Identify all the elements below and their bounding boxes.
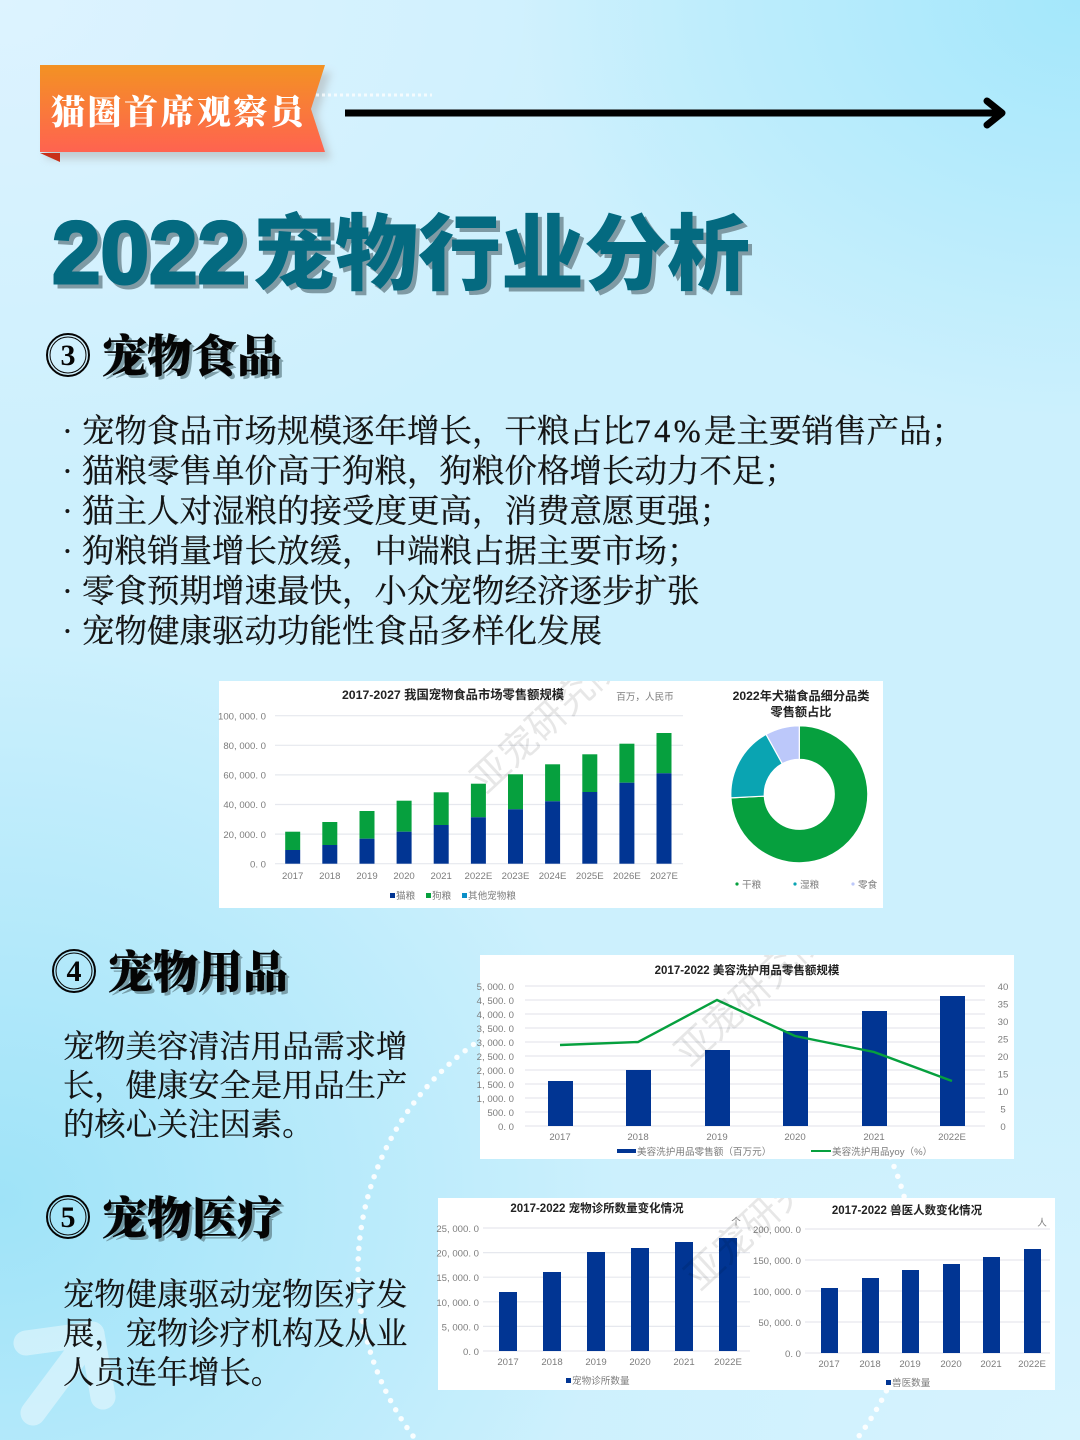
left axis: 4, 000. 0 (477, 1010, 514, 1021)
left axis: 3, 500. 0 (477, 1024, 514, 1035)
chart: number of clinics: 个 (731, 1217, 741, 1228)
left axis (477, 982, 514, 1133)
watermark: 亚宠研究院 (670, 1130, 846, 1300)
chart: number of clinics: 15, 000. 0 (436, 1273, 479, 1284)
chart: pet food retail stacked bars: 2026E (613, 871, 641, 882)
right axis: 40 (998, 982, 1008, 993)
heading: section 4: 4 (66, 955, 82, 988)
heading: section 4: 宠物用品 (111, 950, 291, 1001)
left axis: 3, 000. 0 (477, 1038, 514, 1049)
chart: number of veterinarians: 50, 000. 0 (758, 1318, 801, 1329)
x axis labels: 2017 (549, 1132, 571, 1143)
chart: donut of food categories: 零售额占比 (771, 704, 831, 719)
chart: pet food retail stacked bars: 60, 000. 0 (223, 770, 266, 782)
chart: pet food retail stacked bars: 40, 000. 0 (223, 800, 266, 811)
chart: number of clinics: 5, 000. 0 (442, 1322, 479, 1334)
chart: pet food retail stacked bars (218, 687, 683, 902)
right axis: 20 (998, 1052, 1008, 1063)
title: 2022 (56, 207, 250, 306)
heading: section 5: 宠物医疗 (105, 1196, 285, 1247)
left axis: 4, 500. 0 (477, 996, 514, 1007)
body text: section 3 bullet list: · (62, 574, 73, 610)
right axis: 25 (998, 1034, 1008, 1046)
left axis: 1, 000. 0 (477, 1094, 514, 1105)
chart: donut of food categories: 湿粮 (800, 879, 820, 891)
body text: section 3 bullet list: 狗粮销量增长放缓，中端粮占据主要市场； (82, 533, 700, 570)
x axis labels (549, 1132, 966, 1143)
chart: number of veterinarians: 兽医数量 (892, 1377, 931, 1389)
chart: number of clinics: 2019 (585, 1357, 607, 1368)
chart: number of veterinarians: 2017 (818, 1359, 840, 1370)
panel: medical charts (436, 1198, 1055, 1390)
chart: number of clinics: 2018 (541, 1357, 563, 1368)
chart: pet food retail stacked bars: 0. 0 (250, 860, 266, 870)
chart: pet food retail stacked bars: 80, 000. 0 (223, 741, 266, 752)
chart: pet food retail stacked bars: 2018 (319, 871, 340, 882)
chart: pet food retail stacked bars: 2025E (576, 871, 604, 882)
ribbon text: 猫圈首席观察员 (51, 93, 308, 132)
chart: number of veterinarians: 2019 (899, 1359, 921, 1370)
body text: section 3 bullet list: 宠物健康驱动功能性食品多样化发展 (82, 613, 602, 650)
chart: number of veterinarians (753, 1203, 1050, 1389)
yoy line (560, 1000, 952, 1081)
chart: pet food retail stacked bars: 猫粮 (396, 890, 416, 902)
chart: pet food retail stacked bars: 百万，人民币 (616, 692, 674, 703)
long black arrow (345, 101, 1002, 125)
legend: 美容洗护用品yoy（%） (832, 1146, 932, 1158)
x axis labels: 2019 (706, 1132, 728, 1143)
right axis (998, 982, 1008, 1133)
right axis: 5 (1000, 1104, 1006, 1116)
left axis: 5, 000. 0 (477, 982, 514, 993)
icon: translucent white arrow (26, 1334, 103, 1413)
title: 2022 (52, 203, 246, 302)
chart title: 2017-2022 美容洗护用品零售额规模 (655, 963, 840, 977)
body text: section 5: 宠物健康驱动宠物医疗发 (63, 1277, 407, 1312)
heading: section 4: 宠物用品 (108, 947, 288, 998)
chart: number of veterinarians: 2020 (940, 1359, 962, 1370)
x axis labels: 2022E (938, 1132, 966, 1143)
body text: section 4: 宠物美容清洁用品需求增 (63, 1029, 407, 1064)
body text: section 3 bullet list: · (62, 534, 73, 570)
chart: number of clinics: 2017 (497, 1357, 519, 1368)
left axis: 1, 500. 0 (477, 1080, 514, 1091)
chart: number of veterinarians: 人 (1037, 1218, 1047, 1229)
dotted line from ribbon (316, 94, 432, 96)
panel: grooming products combo chart (476, 955, 1014, 1159)
chart: pet food retail stacked bars: 其他宠物粮 (468, 890, 516, 902)
chart: pet food retail stacked bars: 2022E (465, 871, 492, 882)
chart: donut of food categories: 2022年犬猫食品细分品类 (733, 688, 869, 703)
legend: 美容洗护用品零售额（百万元） (637, 1146, 771, 1158)
chart: number of clinics: 2017-2022 宠物诊所数量变化情况 (510, 1201, 684, 1215)
chart: pet food retail stacked bars: 2024E (539, 871, 566, 882)
heading: section 3: 3 (60, 339, 76, 372)
body text: section 3 bullet list: 宠物食品市场规模逐年增长，干粮占比74%是主要销售产品； (82, 413, 964, 450)
left axis: 2, 000. 0 (477, 1066, 514, 1077)
heading: section 5: 宠物医疗 (102, 1193, 282, 1244)
title (52, 187, 754, 311)
right axis: 35 (998, 1000, 1008, 1010)
left axis: 0. 0 (498, 1122, 514, 1133)
right axis: 15 (998, 1070, 1008, 1080)
chart: number of veterinarians: 100, 000. 0 (753, 1287, 801, 1298)
heading: section 3: 宠物食品 (102, 331, 282, 382)
chart: number of veterinarians: 200, 000. 0 (753, 1225, 801, 1236)
decorative dotted circle (358, 992, 914, 1436)
chart: number of clinics: 2020 (629, 1357, 651, 1368)
chart: number of clinics (436, 1201, 750, 1387)
chart: number of clinics: 20, 000. 0 (436, 1248, 479, 1260)
chart: pet food retail stacked bars: 2027E (650, 871, 678, 882)
body text: section 5: 展，宠物诊疗机构及从业 (63, 1316, 407, 1351)
chart: number of clinics: 2021 (673, 1357, 695, 1368)
chart: number of veterinarians: 2022E (1018, 1359, 1046, 1370)
title: 宠物行业分析 (256, 191, 754, 311)
left axis: 500. 0 (487, 1108, 514, 1119)
panel: food charts (218, 681, 883, 908)
watermark: 亚宠研究院 (456, 633, 632, 803)
chart: pet food retail stacked bars: 2017 (282, 871, 303, 882)
body text: section 3 bullet list: 猫主人对湿粮的接受度更高，消费意愿更强； (82, 493, 732, 530)
body text: section 4: 长，健康安全是用品生产 (63, 1068, 407, 1103)
left axis: 2, 500. 0 (477, 1052, 514, 1063)
heading: section 5: 5 (60, 1201, 76, 1234)
chart: number of veterinarians: 2017-2022 兽医人数变化情况 (832, 1203, 983, 1217)
body text: section 3 bullet list: · (62, 614, 73, 650)
chart: pet food retail stacked bars: 2019 (356, 871, 378, 882)
chart: pet food retail stacked bars: 2021 (431, 871, 452, 882)
body text: section 5: 人员连年增长。 (63, 1355, 282, 1390)
body text: section 3 bullet list: · (62, 494, 73, 530)
chart: number of veterinarians: 150, 000. 0 (753, 1256, 801, 1267)
body text: section 3 bullet list: 猫粮零售单价高于狗粮，狗粮价格增长动力不足； (82, 453, 797, 490)
chart: number of clinics: 宠物诊所数量 (572, 1375, 630, 1387)
chart: number of clinics: 10, 000. 0 (436, 1298, 479, 1309)
chart: pet food retail stacked bars: 狗粮 (432, 890, 452, 902)
body text: section 3 bullet list: 零食预期增速最快，小众宠物经济逐步扩张 (82, 573, 700, 610)
chart: pet food retail stacked bars: 100, 000. 0 (218, 712, 266, 722)
chart: pet food retail stacked bars: 2020 (393, 871, 415, 882)
chart: number of veterinarians: 0. 0 (785, 1349, 801, 1360)
body text: section 5 (63, 1277, 407, 1390)
right axis: 30 (998, 1017, 1008, 1028)
chart: pet food retail stacked bars: 20, 000. 0 (223, 830, 266, 841)
chart: donut of food categories (731, 688, 878, 891)
body text: section 4 (63, 1029, 407, 1142)
body text: section 4: 的核心关注因素。 (63, 1107, 313, 1142)
body text: section 3 bullet list: · (62, 454, 73, 490)
x axis labels: 2018 (627, 1132, 649, 1143)
body text: section 3 bullet list: · (62, 414, 73, 450)
chart: number of clinics: 2022E (714, 1357, 742, 1368)
heading: section 3: 宠物食品 (105, 334, 285, 385)
right axis: 10 (998, 1087, 1008, 1098)
chart: pet food retail stacked bars: 2023E (502, 871, 529, 882)
right axis: 0 (1000, 1122, 1006, 1133)
chart: pet food retail stacked bars: 2017-2027 我国宠物食品市场零售额规模 (342, 687, 565, 702)
ribbon badge (40, 65, 331, 162)
title: 宠物行业分析 (252, 187, 750, 307)
chart: number of veterinarians: 2021 (980, 1359, 1002, 1370)
bars (548, 996, 965, 1126)
body text: section 3 bullet list (62, 413, 964, 650)
chart: donut of food categories: 零食 (858, 879, 878, 891)
x axis labels: 2020 (784, 1132, 806, 1143)
watermark: 亚宠研究院 (660, 906, 836, 1076)
legend (617, 1146, 932, 1158)
chart: donut of food categories: 干粮 (742, 879, 762, 891)
x axis labels: 2021 (863, 1132, 885, 1143)
chart: number of veterinarians: 2018 (859, 1359, 881, 1370)
chart: number of clinics: 0. 0 (463, 1347, 479, 1358)
chart: number of clinics: 25, 000. 0 (436, 1224, 479, 1235)
